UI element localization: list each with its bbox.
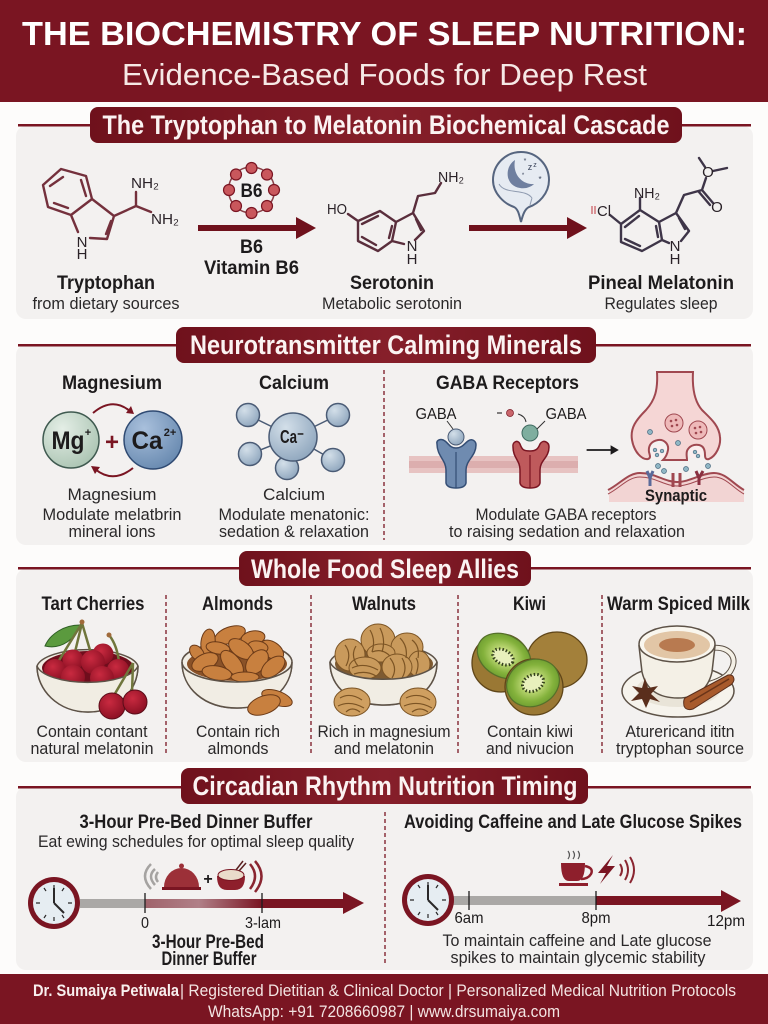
molecule: tryptophan: H (77, 246, 87, 263)
food: almonds (182, 594, 294, 758)
food: warm spiced milk (607, 594, 750, 758)
food: tart cherries (30, 594, 154, 758)
food: walnuts (318, 594, 450, 758)
arrow: to melatonin (469, 217, 587, 239)
text: GABA caption: Modulate GABA receptors (476, 505, 656, 524)
molecule: serotonin: N (407, 238, 417, 255)
icon: moon bubble: * (538, 175, 542, 184)
icon: Mg and Ca ions: Mg (52, 427, 84, 455)
food: warm spiced milk: Aturericand ititn (626, 722, 734, 741)
timeline: caffeine: 6am (454, 910, 484, 927)
timeline: dinner buffer: 0 (141, 915, 149, 932)
molecule: tryptophan: NH₂ (151, 211, 179, 228)
footer (0, 974, 768, 1024)
icon: clock right (402, 874, 454, 926)
title: THE BIOCHEMISTRY OF SLEEP NUTRITION: (22, 15, 747, 52)
food: tart cherries: Contain contant (36, 722, 148, 741)
text: magnesium caption: Magnesium (68, 485, 156, 504)
food: walnuts: Walnuts (352, 594, 416, 615)
icon: Mg and Ca ions: + (85, 427, 91, 439)
molecule: melatonin: O (702, 164, 714, 181)
heading: calcium: Calcium (259, 373, 329, 394)
footer: Dr. Sumaiya Petiwala (33, 982, 180, 1000)
molecule: melatonin: H (670, 251, 680, 268)
food: almonds: almonds (208, 739, 268, 758)
molecule: melatonin: N (670, 238, 680, 255)
heading: GABA receptors: GABA Receptors (436, 373, 579, 394)
text: calcium caption: Calcium (263, 485, 325, 504)
food: kiwi: and nivucion (486, 739, 574, 758)
header band (0, 0, 768, 102)
icon: moon bubble (493, 152, 549, 222)
text: dinner buffer caption (152, 932, 264, 970)
text: caffeine caption (442, 931, 712, 967)
molecule: melatonin (592, 158, 727, 268)
icon: B6 ring: B6 (240, 181, 262, 202)
icon: meal and waves: + (203, 871, 213, 888)
icon: Mg and Ca ions: Ca (132, 427, 164, 455)
icon: moon bubble: z (528, 162, 533, 172)
heading: timing banner: Circadian Rhythm Nutrition Timing (192, 771, 578, 801)
molecule: tryptophan (43, 169, 179, 263)
icon: moon bubble: * (522, 173, 525, 179)
panel: circadian timing (16, 768, 753, 970)
text: dinner buffer caption: 3-Hour Pre-Bed (152, 932, 264, 953)
text: calcium caption (218, 485, 370, 541)
text: magnesium caption: Modulate melatbrin (42, 505, 182, 524)
subtitle: Evidence-Based Foods for Deep Rest (122, 57, 647, 92)
panel: calming minerals (16, 327, 753, 545)
heading: magnesium: Magnesium (62, 373, 162, 394)
text: magnesium caption (42, 485, 182, 541)
molecule: melatonin: Cl (597, 203, 611, 220)
label: tryptophan: Tryptophan (57, 273, 155, 294)
timeline: dinner buffer (80, 892, 364, 932)
text: caffeine caption: spikes to maintain glycemic stability (450, 948, 706, 967)
text: calcium caption: Modulate menatonic: (218, 505, 370, 524)
heading: cascade banner: The Tryptophan to Melatonin Biochemical Cascade (102, 110, 670, 140)
label: tryptophan: from dietary sources (32, 294, 180, 313)
text: calcium caption: sedation & relaxation (219, 522, 369, 541)
text: dinner buffer heading (38, 812, 354, 851)
molecule: melatonin: NH₂ (634, 185, 660, 202)
icon: moon bubble: z (533, 162, 537, 169)
text: magnesium caption: mineral ions (68, 522, 156, 541)
food: warm spiced milk: Warm Spiced Milk (607, 594, 750, 615)
label: vitamin B6: B6 (240, 237, 263, 258)
food: kiwi (469, 594, 587, 758)
timeline: caffeine: 12pm (707, 913, 745, 930)
label: vitamin B6: Vitamin B6 (204, 258, 299, 279)
icon: Mg and Ca ions: 2+ (164, 427, 176, 439)
molecule: serotonin: H (407, 251, 417, 268)
panel: tryptophan cascade (16, 107, 753, 319)
diagram: synapse (608, 372, 744, 505)
text: dinner buffer caption: Dinner Buffer (162, 949, 257, 970)
molecule: melatonin: O (711, 199, 723, 216)
icon: moon bubble: * (524, 158, 527, 165)
food: almonds: Contain rich (196, 722, 280, 741)
label: serotonin: Metabolic serotonin (322, 294, 462, 313)
food: tart cherries: Tart Cherries (42, 594, 144, 615)
icon: Mg and Ca ions (43, 404, 182, 476)
arrow: to synapse (587, 446, 618, 454)
label: tryptophan (32, 273, 180, 313)
molecule: serotonin: HO (327, 201, 347, 218)
molecule: tryptophan: N (77, 234, 87, 251)
label: pineal melatonin (588, 273, 734, 313)
text: caffeine caption: To maintain caffeine and Late glucose (442, 931, 712, 950)
label: serotonin: Serotonin (350, 273, 434, 294)
food: kiwi: Kiwi (513, 594, 546, 615)
icon: meal and waves (145, 861, 262, 892)
icon: calcium molecule (236, 404, 350, 480)
food: kiwi: Contain kiwi (487, 722, 573, 741)
text: GABA caption: to raising sedation and relaxation (449, 522, 685, 541)
food: almonds: Almonds (202, 594, 273, 615)
diagram: GABA receptors (409, 406, 587, 488)
text: dinner buffer heading: Eat ewing schedules for optimal sleep quality (38, 832, 354, 851)
food: walnuts: Rich in magnesium (318, 722, 450, 741)
text: GABA caption (449, 505, 685, 541)
icon: coffee and glucose spike (559, 851, 634, 886)
diagram: synapse: Synaptic (645, 486, 707, 505)
footer: | Registered Dietitian & Clinical Doctor | Personalized Medical Nutrition Protocols (180, 982, 736, 1000)
icon: calcium molecule: Ca⁻ (280, 427, 304, 447)
molecule: serotonin: NH₂ (438, 169, 464, 186)
label: pineal melatonin: Regulates sleep (604, 294, 718, 313)
timeline: dinner buffer: 3-lam (245, 915, 281, 932)
diagram: GABA receptors: GABA (416, 406, 457, 423)
food: warm spiced milk: tryptophan source (616, 739, 744, 758)
label: vitamin B6 (204, 237, 299, 279)
panel: whole foods (16, 551, 753, 762)
text: dinner buffer heading: 3-Hour Pre-Bed Dinner Buffer (80, 812, 313, 833)
icon: B6 ring (224, 162, 280, 218)
icon: clock left (28, 877, 80, 929)
heading: minerals banner: Neurotransmitter Calming Minerals (190, 330, 582, 360)
icon: Mg and Ca ions: + (105, 429, 119, 456)
molecule: serotonin (327, 169, 464, 268)
food: walnuts: and melatonin (334, 739, 434, 758)
food: tart cherries: natural melatonin (30, 739, 154, 758)
timeline: caffeine (453, 890, 745, 930)
label: serotonin (322, 273, 462, 313)
label: pineal melatonin: Pineal Melatonin (588, 273, 734, 294)
arrow: B6 conversion (198, 217, 316, 239)
footer: WhatsApp: +91 7208660987 | www.drsumaiya.com (208, 1003, 560, 1021)
molecule: tryptophan: NH₂ (131, 175, 159, 192)
heading: foods banner: Whole Food Sleep Allies (251, 554, 519, 584)
timeline: caffeine: 8pm (582, 910, 610, 927)
diagram: GABA receptors: GABA (546, 406, 587, 423)
